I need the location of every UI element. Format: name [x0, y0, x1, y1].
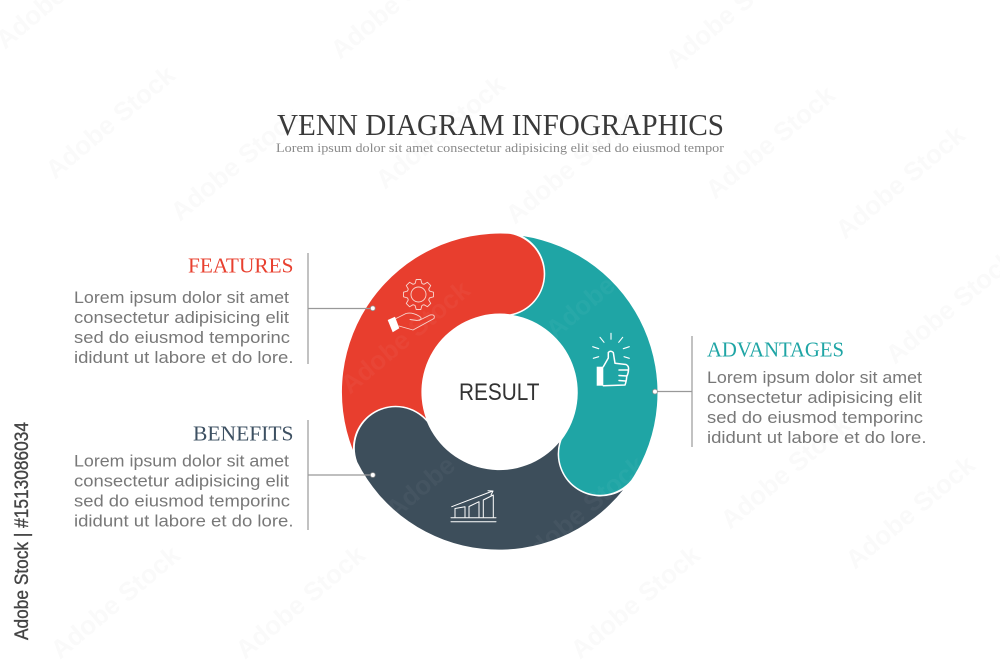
- text block: features: Lorem ipsum dolor sit amet: [74, 288, 289, 307]
- text block: benefits: [74, 452, 294, 530]
- background watermarks: Adobe Stock: [230, 539, 371, 665]
- title: VENN DIAGRAM INFOGRAPHICS: [277, 107, 724, 142]
- background watermarks: Adobe Stock: [565, 539, 706, 665]
- segment: features (red): [342, 234, 544, 450]
- icon: growth chart: [451, 491, 496, 522]
- stock image id label: Adobe Stock | #1513086034: [12, 422, 33, 640]
- text block: features: consectetur adipisicing elit: [74, 308, 289, 327]
- text block: features: [74, 288, 294, 367]
- text block: features: ididunt ut labore et do lore.: [74, 348, 294, 367]
- icon: thumbs up: [593, 333, 629, 386]
- segment: benefits (dark slate): [340, 325, 629, 608]
- text block: features: sed do eiusmod temporinc: [74, 328, 291, 347]
- connector: features: [308, 253, 375, 364]
- background watermarks: Adobe Stock: [165, 101, 306, 227]
- segment watermarks: Adobe Stock: [540, 219, 681, 345]
- ring diagram: [340, 227, 715, 608]
- heading: advantages: ADVANTAGES: [707, 338, 844, 362]
- text block: advantages: [707, 368, 926, 447]
- text block: benefits: ididunt ut labore et do lore.: [74, 512, 294, 530]
- panel: advantages text: [707, 338, 926, 447]
- segment watermarks: Adobe Stock: [380, 399, 521, 525]
- text block: advantages: consectetur adipisicing elit: [707, 388, 922, 407]
- background watermarks: Adobe Stock: [370, 69, 511, 195]
- background watermarks: Adobe Stock: [715, 409, 856, 535]
- background watermarks: Adobe Stock: [40, 59, 181, 185]
- background watermarks: Adobe Stock: [500, 104, 641, 230]
- segment watermarks: Adobe Stock: [335, 274, 476, 400]
- background watermarks: Adobe Stock: [45, 539, 186, 665]
- background watermarks: Adobe Stock: [840, 449, 981, 575]
- background watermarks: Adobe Stock: [830, 119, 971, 245]
- panel: benefits text: [74, 422, 294, 530]
- background watermarks: Adobe Stock: [700, 79, 841, 205]
- hand: [388, 313, 434, 332]
- text block: advantages: Lorem ipsum dolor sit amet: [707, 368, 922, 387]
- panel: features text: [74, 254, 294, 367]
- heading: benefits: BENEFITS: [193, 422, 294, 446]
- segment watermarks: Adobe Stock: [510, 449, 651, 575]
- text block: benefits: consectetur adipisicing elit: [74, 472, 289, 490]
- heading: features: FEATURES: [188, 254, 294, 278]
- subtitle: Lorem ipsum dolor sit amet consectetur adipisicing elit sed do eiusmod tempor: [276, 140, 725, 155]
- center result label: RESULT: [459, 379, 540, 406]
- segment: advantages (teal): [427, 227, 715, 509]
- text block: advantages: sed do eiusmod temporinc: [707, 408, 924, 427]
- text block: advantages: ididunt ut labore et do lore.: [707, 428, 926, 447]
- icon: gear and hand: [388, 280, 434, 332]
- text block: benefits: Lorem ipsum dolor sit amet: [74, 452, 289, 470]
- connector: advantages: [653, 336, 692, 447]
- segment watermarks: [335, 219, 681, 575]
- connector: benefits: [308, 420, 375, 530]
- gear: [404, 280, 434, 310]
- text block: benefits: sed do eiusmod temporinc: [74, 492, 291, 510]
